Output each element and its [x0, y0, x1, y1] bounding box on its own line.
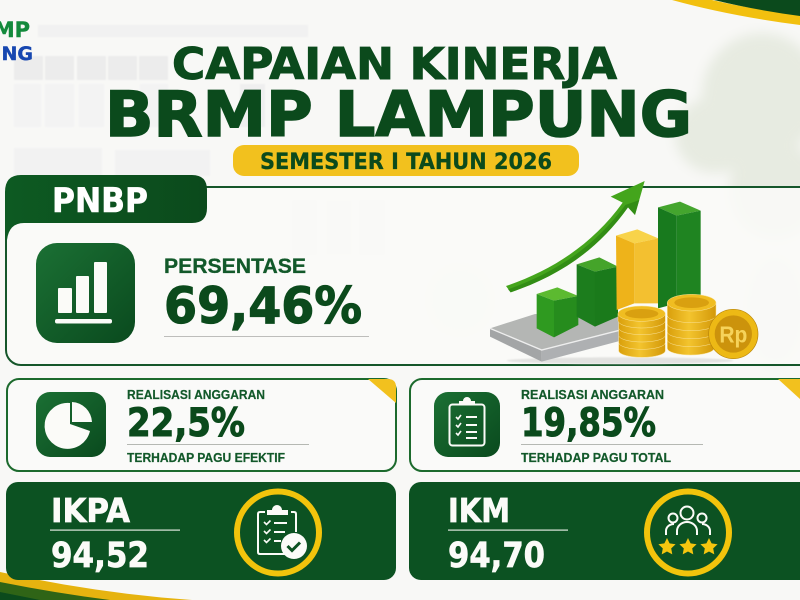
- coin stack right: [667, 294, 716, 355]
- subtitle pill: SEMESTER I TAHUN 2026: [260, 150, 552, 175]
- card: realisasi pagu efektif: TERHADAP PAGU EFEKTIF: [127, 450, 285, 465]
- icon: pie chart: [36, 392, 106, 457]
- decoration: bottom-left swoosh: [0, 572, 192, 600]
- logo: [0, 18, 33, 65]
- value: 69,46%: 69,46%: [164, 277, 362, 335]
- card: IKPA: 94,52: [51, 536, 149, 576]
- card: IKPA: [6, 482, 396, 580]
- corner accent: [778, 379, 800, 399]
- title: BRMP LAMPUNG: [105, 78, 692, 151]
- card: realisasi pagu total: TERHADAP PAGU TOTAL: [521, 450, 671, 465]
- icon: clipboard check: [237, 492, 319, 574]
- card: realisasi pagu efektif: 22,5%: [127, 401, 245, 446]
- card: IKM: [409, 482, 800, 580]
- title: [105, 39, 692, 151]
- card: realisasi pagu total: REALISASI ANGGARAN: [521, 387, 664, 402]
- panel: PNBP: [5, 175, 800, 365]
- card: realisasi pagu efektif: [7, 379, 396, 471]
- illustration: growth chart with coins: [490, 181, 758, 364]
- card: IKM: 94,70: [448, 536, 545, 576]
- icon: clipboard: [434, 392, 500, 457]
- card: IKPA: IKPA: [51, 491, 130, 530]
- card: realisasi pagu efektif: REALISASI ANGGARAN: [127, 387, 265, 402]
- icon: bar chart: [36, 243, 135, 343]
- coin stack left: [618, 306, 665, 357]
- tab: PNBP: [5, 175, 207, 240]
- label: persentase: PERSENTASE: [164, 255, 306, 278]
- card: realisasi pagu total: [410, 379, 800, 471]
- card: realisasi pagu total: 19,85%: [521, 401, 656, 446]
- coin: Rp: Rp: [719, 321, 747, 347]
- title: CAPAIAN KINERJA: [172, 39, 617, 90]
- icon: people and stars: [647, 492, 729, 574]
- tab: PNBP: PNBP: [52, 181, 148, 220]
- decoration: top-right swoosh: [672, 0, 800, 25]
- card: IKM: IKM: [448, 491, 510, 530]
- corner accent: [368, 379, 396, 403]
- coin: Rp: [709, 309, 758, 359]
